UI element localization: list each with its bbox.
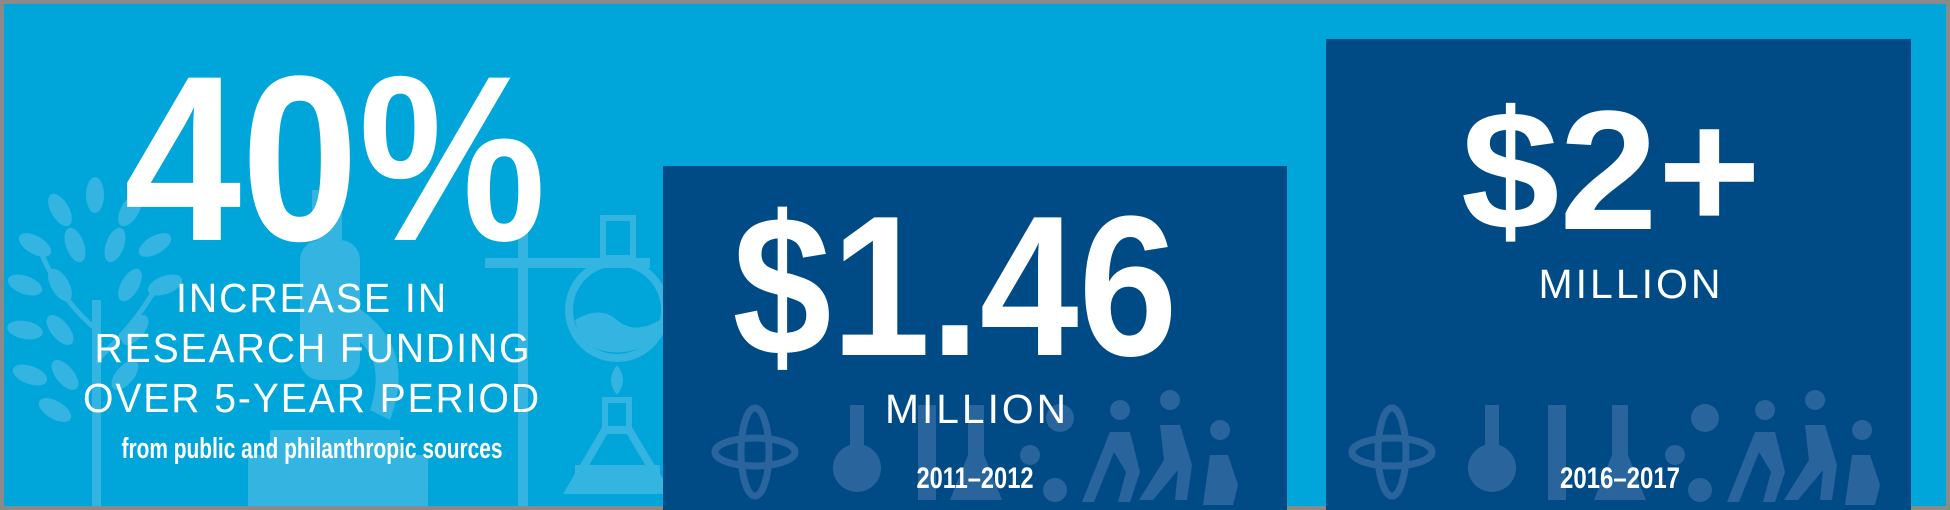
label: year: 2011–2012 [916,462,1034,495]
background icons: left decorations [5,177,665,506]
description text: INCREASE IN [176,275,448,321]
label: year: 2016–2017 [1560,462,1680,495]
icon: microscope [248,190,428,506]
icon: tree [5,177,185,506]
description text: OVER 5-YEAR PERIOD [83,375,541,421]
icons: science silhouettes [715,390,1238,505]
description text: RESEARCH FUNDING [94,325,532,371]
value: $2+: $2+ [1461,76,1761,266]
headline stat: 40%: 40% [124,27,546,291]
description text [83,275,541,421]
label: MILLION: MILLION [1538,261,1724,307]
icon: flask stand [485,218,665,506]
subtext: sources: from public and philanthropic sources [122,433,502,465]
label: MILLION: MILLION [885,386,1069,432]
panel: 2011-2012 bar [663,166,1287,510]
value: $1.46: $1.46 [732,175,1178,398]
icons: science silhouettes [1352,390,1880,505]
headline stat: 40% [83,27,546,465]
panel: 2016-2017 bar [1326,39,1911,510]
